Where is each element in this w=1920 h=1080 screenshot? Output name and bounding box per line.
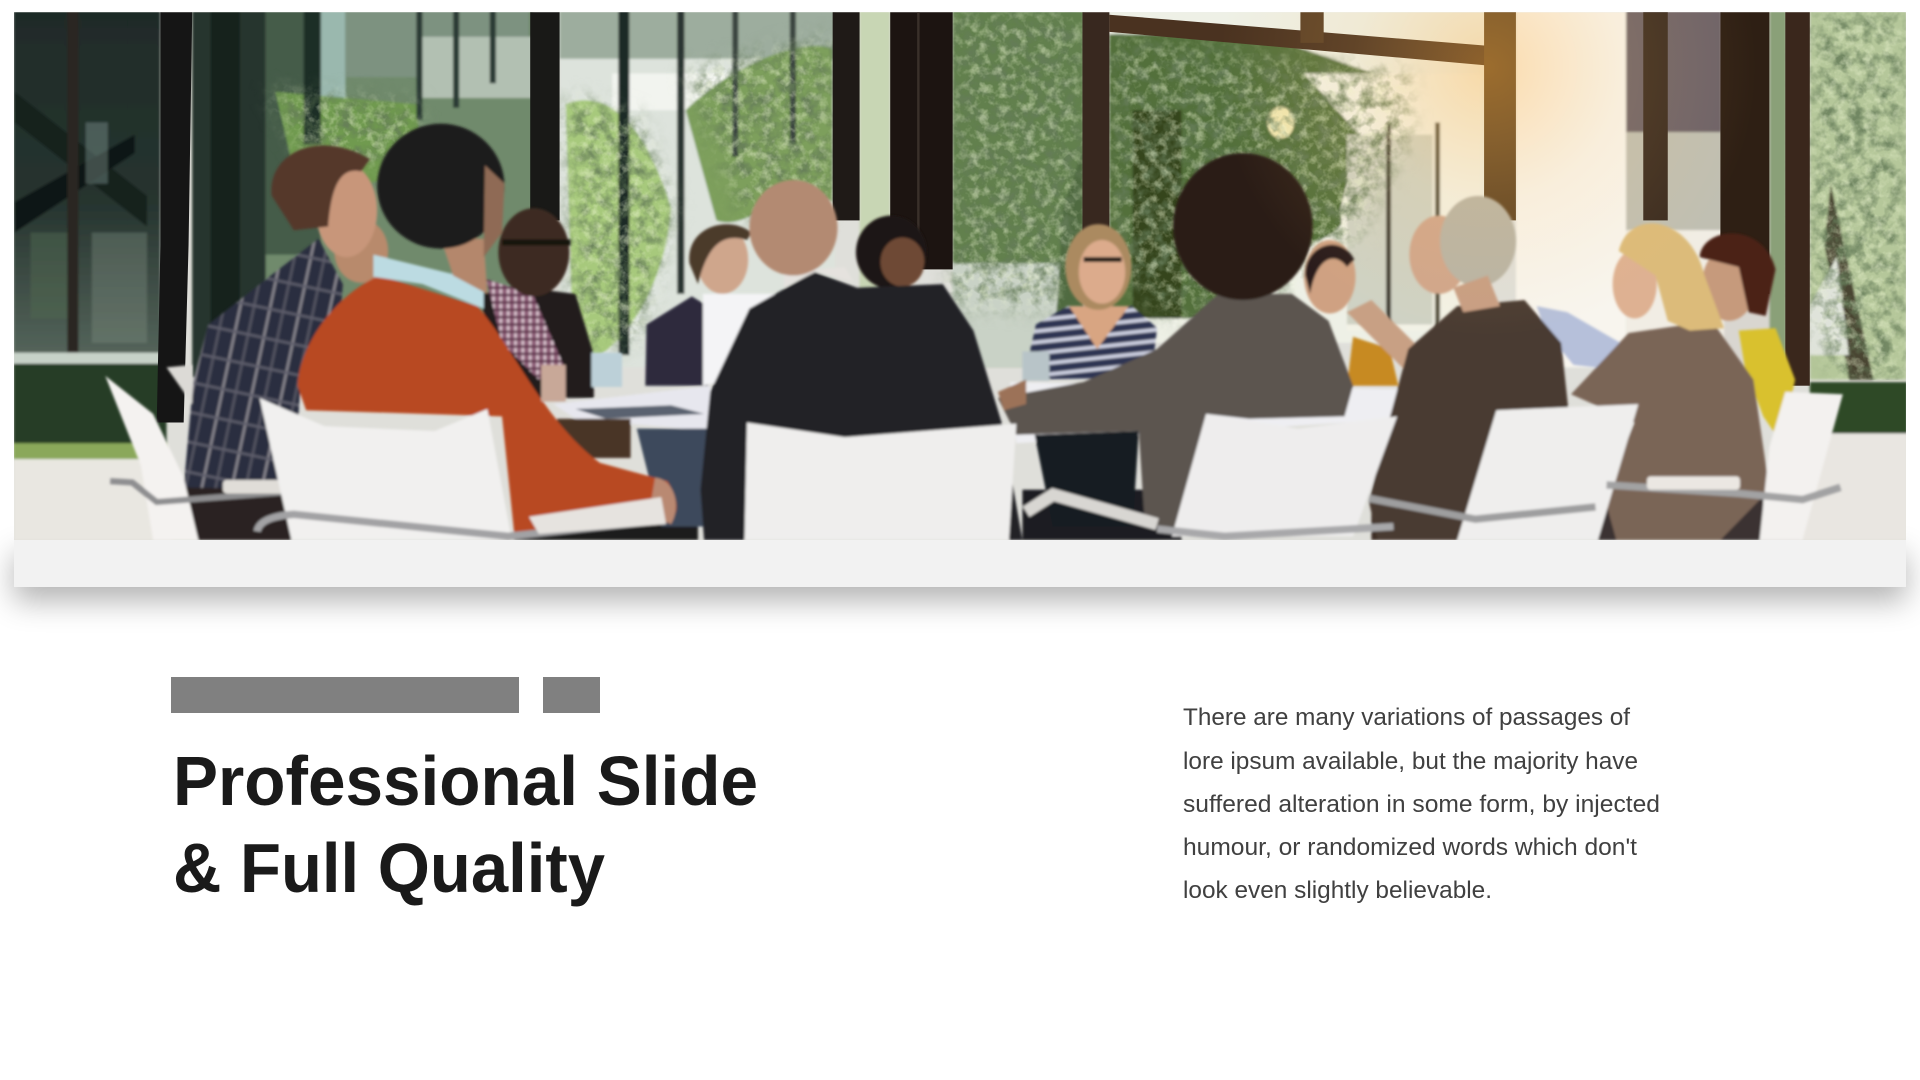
background: windows and garden bbox=[13, 10, 1908, 540]
title: & Full Quality bbox=[173, 829, 605, 907]
body text: suffered alteration in some form, by injected bbox=[1183, 791, 1660, 818]
panel: photo shadow strip bbox=[14, 540, 1906, 587]
photo: team meeting around a table bbox=[13, 10, 1910, 541]
under-table shadows bbox=[184, 484, 294, 540]
title: Professional Slide bbox=[173, 742, 758, 820]
person: woman with short hair bbox=[645, 224, 752, 386]
window frames bbox=[157, 10, 1810, 422]
person: woman behind, yellow-ochre top bbox=[1304, 240, 1398, 386]
white column bbox=[1516, 10, 1626, 367]
middle-left window bbox=[192, 10, 533, 377]
chair: far left bbox=[105, 376, 198, 540]
person: blue shirt arm bbox=[1537, 306, 1631, 370]
person: afro hair, grey blazer bbox=[998, 153, 1353, 527]
foliage texture bbox=[245, 12, 1910, 380]
person: man in orange sweater bbox=[298, 124, 676, 534]
chair: dark suit bbox=[744, 422, 1016, 540]
central tree window bbox=[952, 12, 1084, 266]
table bbox=[553, 386, 710, 431]
person: woman in dark hair bbox=[856, 216, 927, 289]
central bright window bbox=[560, 10, 835, 367]
chair: right bbox=[1760, 392, 1843, 540]
person: grey-haired man bbox=[1347, 196, 1570, 540]
people and furniture bbox=[105, 124, 1843, 540]
narrow window bbox=[860, 10, 890, 294]
right-most windows bbox=[1726, 313, 1768, 361]
person: woman in yellow sweater bbox=[1700, 233, 1795, 443]
right tree window bbox=[1109, 10, 1489, 343]
person: bald man in dark suit bbox=[700, 180, 1022, 540]
chair: afro bbox=[1172, 414, 1397, 536]
accent bar: short bbox=[543, 677, 600, 713]
body text: lore ipsum available, but the majority have bbox=[1183, 748, 1638, 775]
body text bbox=[1183, 704, 1660, 904]
hedge and grass bbox=[13, 364, 167, 444]
person: woman in striped top bbox=[1024, 224, 1157, 527]
sunlight glow bbox=[1102, 12, 1910, 540]
title bbox=[173, 742, 758, 907]
person: laptop bbox=[703, 294, 780, 386]
person: glass on table bbox=[1022, 351, 1049, 381]
chairs bbox=[105, 365, 1843, 540]
chair: orange sweater bbox=[260, 398, 512, 540]
person: bearded man with glasses bbox=[478, 208, 594, 398]
chair: grey-haired bbox=[1457, 404, 1638, 540]
person: man in plaid shirt bbox=[184, 146, 388, 490]
body text: humour, or randomized words which don't bbox=[1183, 834, 1637, 861]
accent bar: long bbox=[171, 677, 519, 713]
body text: There are many variations of passages of bbox=[1183, 704, 1630, 731]
body text: look even slightly believable. bbox=[1183, 877, 1492, 904]
person: blonde woman bbox=[1571, 223, 1769, 540]
left stairs area bbox=[13, 10, 160, 361]
